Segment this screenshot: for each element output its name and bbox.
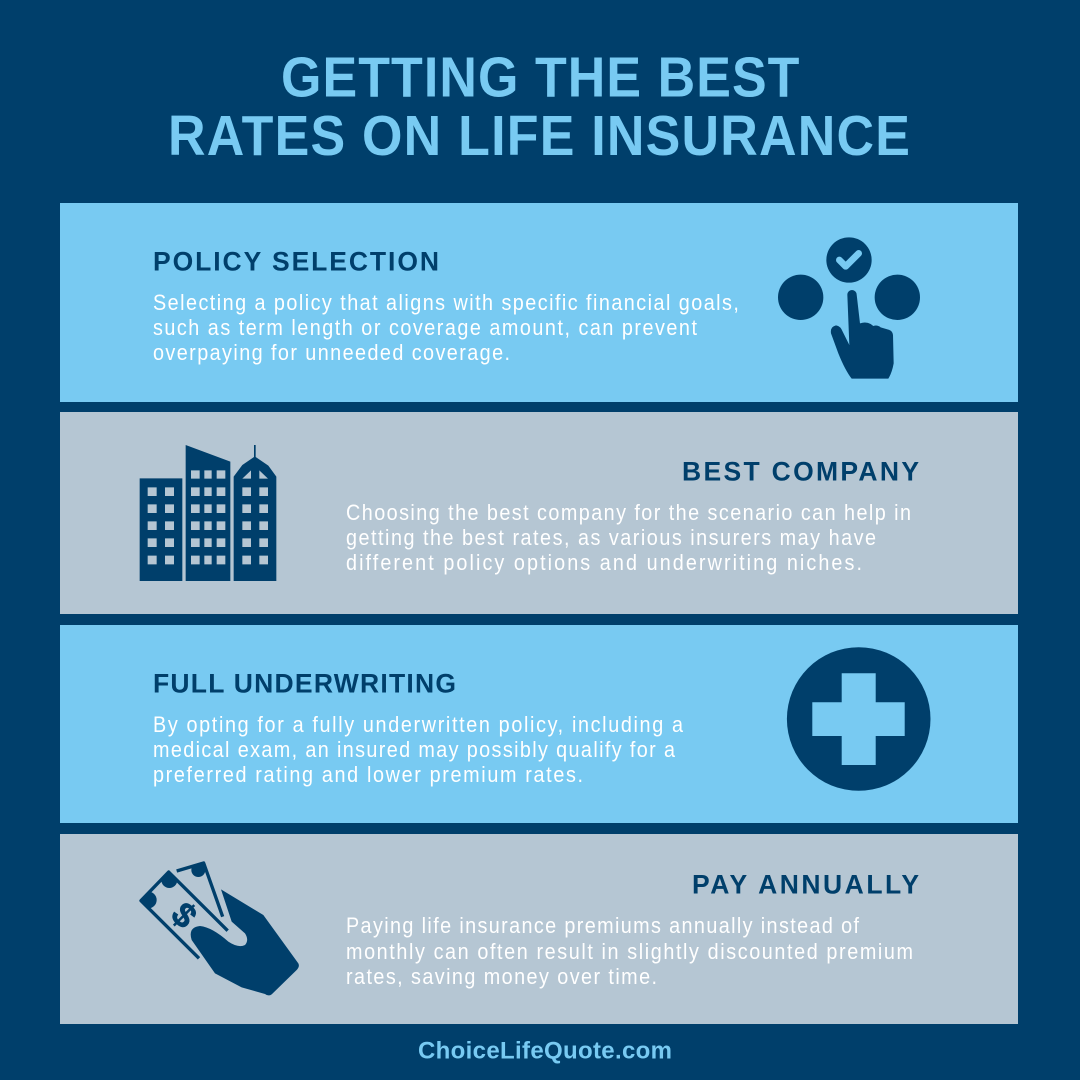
text block: pay annually: rates, saving money over time. xyxy=(346,965,657,989)
panel: best company xyxy=(60,412,1018,614)
text block: best company: Choosing the best company for the scenario can help in xyxy=(346,501,911,525)
footer: website: ChoiceLifeQuote.com xyxy=(418,1038,672,1064)
text block: full underwriting: By opting for a fully underwritten policy, including a xyxy=(153,713,683,737)
text block: best company: getting the best rates, as various insurers may have xyxy=(346,526,876,550)
text block: best company xyxy=(346,501,911,575)
title: RATES ON LIFE INSURANCE xyxy=(168,104,910,167)
text block: full underwriting: medical exam, an insured may possibly qualify for a xyxy=(153,738,675,762)
text block: best company: different policy options and underwriting niches. xyxy=(346,551,862,575)
panel: full underwriting xyxy=(60,625,1018,823)
text block: pay annually: monthly can often result in slightly discounted premium xyxy=(346,940,913,964)
heading: pay annually: PAY ANNUALLY xyxy=(692,870,919,900)
heading: policy selection: POLICY SELECTION xyxy=(153,246,439,276)
heading: full underwriting: FULL UNDERWRITING xyxy=(153,668,456,698)
title xyxy=(168,46,910,167)
icon: medical cross xyxy=(787,647,930,791)
icon: office buildings xyxy=(140,445,276,581)
text block: full underwriting xyxy=(153,713,683,787)
text block: policy selection xyxy=(153,291,739,365)
text block: pay annually xyxy=(346,914,913,989)
icon: hand holding money: $ xyxy=(163,895,204,936)
text block: pay annually: Paying life insurance premiums annually instead of xyxy=(346,914,859,938)
icon: hand choosing a checked option xyxy=(778,237,920,379)
panel: pay annually xyxy=(60,834,1018,1024)
title: GETTING THE BEST xyxy=(281,46,799,109)
text block: policy selection: Selecting a policy that aligns with specific financial goals, xyxy=(153,291,739,315)
text block: full underwriting: preferred rating and lower premium rates. xyxy=(153,763,583,787)
panel: policy selection xyxy=(60,203,1018,402)
text block: policy selection: such as term length or coverage amount, can prevent xyxy=(153,316,697,340)
icon: hand holding money xyxy=(140,863,299,995)
text block: policy selection: overpaying for unneeded coverage. xyxy=(153,341,510,365)
heading: best company: BEST COMPANY xyxy=(682,456,919,486)
